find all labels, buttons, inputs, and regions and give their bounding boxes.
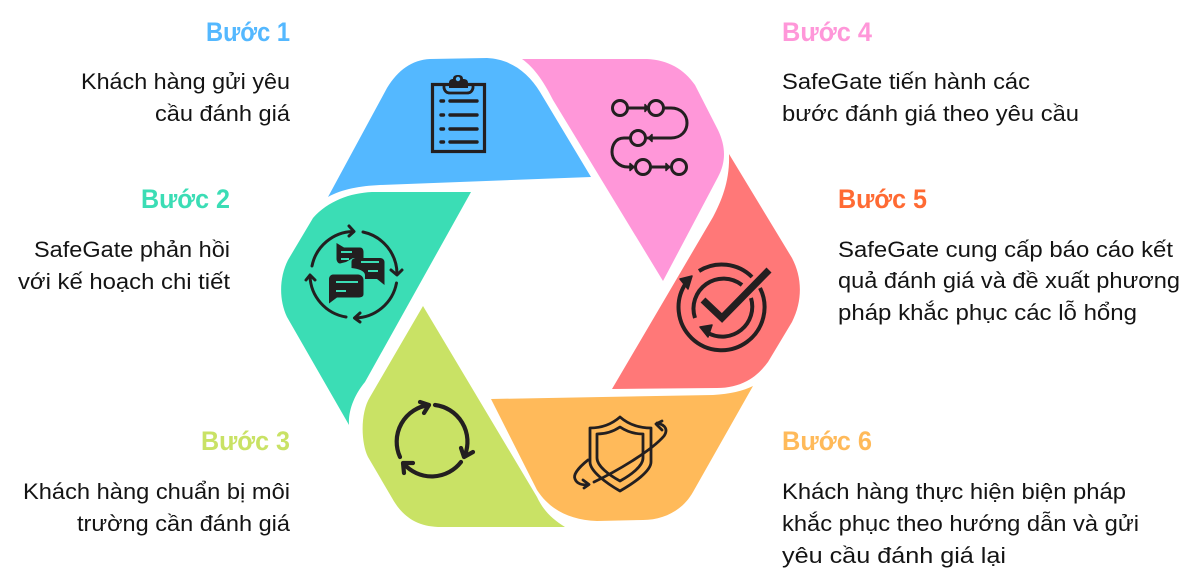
heading: Bước 1: Bước 1 [206,17,290,47]
icon: chat bubbles in cycle [306,226,402,322]
text block: step 3 [23,426,291,536]
icon: process flow [612,100,687,174]
body: step 5 description: pháp khắc phục các lỗ hổng [838,300,1137,325]
heading: Bước 2: Bước 2 [141,184,230,214]
body: step 3 description [23,479,291,536]
text block: step 5 [838,184,1180,325]
body: step 6 description: yêu cầu đánh giá lại [782,543,1006,568]
body: step 1 description: Khách hàng gửi yêu [81,69,290,94]
body: step 1 description [81,69,291,126]
body: step 5 description: SafeGate cung cấp báo cáo kết [838,237,1174,262]
panel: step 5 red segment [612,154,800,389]
body: step 4 description: bước đánh giá theo yêu cầu [782,101,1079,126]
heading: Bước 6: Bước 6 [782,426,872,456]
text block: step 1 [81,17,291,126]
body: step 2 description [18,237,231,294]
panel: step 3 green segment [363,306,565,527]
body: step 2 description: với kế hoạch chi tiết [18,269,231,294]
body: step 6 description [782,479,1139,568]
panel: step 6 orange segment [491,386,753,521]
text block: step 4 [782,17,1079,126]
body: step 5 description: quả đánh giá và đề xuất phương [838,268,1180,293]
heading: Bước 5: Bước 5 [838,184,927,214]
body: step 4 description: SafeGate tiến hành các [782,69,1030,94]
icon: cycle with check mark [679,265,769,350]
icon: circular refresh arrows [397,402,473,476]
text block: step 2 [18,184,231,294]
body: step 6 description: Khách hàng thực hiện biện pháp [782,479,1126,504]
body: step 3 description: Khách hàng chuẩn bị môi [23,479,290,504]
body: step 6 description: khắc phục theo hướng dẫn và gửi [782,511,1139,536]
icon: shield with orbit arrow [575,417,666,491]
icon: clipboard checklist [432,75,484,152]
text block: step 6 [782,426,1139,568]
heading: Bước 3: Bước 3 [201,426,290,456]
body: step 2 description: SafeGate phản hồi [34,237,230,262]
body: step 1 description: cầu đánh giá [155,101,291,126]
body: step 4 description [782,69,1079,126]
body: step 3 description: trường cần đánh giá [77,511,291,536]
panel: step 1 blue segment [328,58,591,197]
heading: Bước 4: Bước 4 [782,17,872,47]
panel: step 4 pink segment [522,59,724,281]
panel: step 2 teal segment [281,192,471,425]
body: step 5 description [838,237,1180,325]
